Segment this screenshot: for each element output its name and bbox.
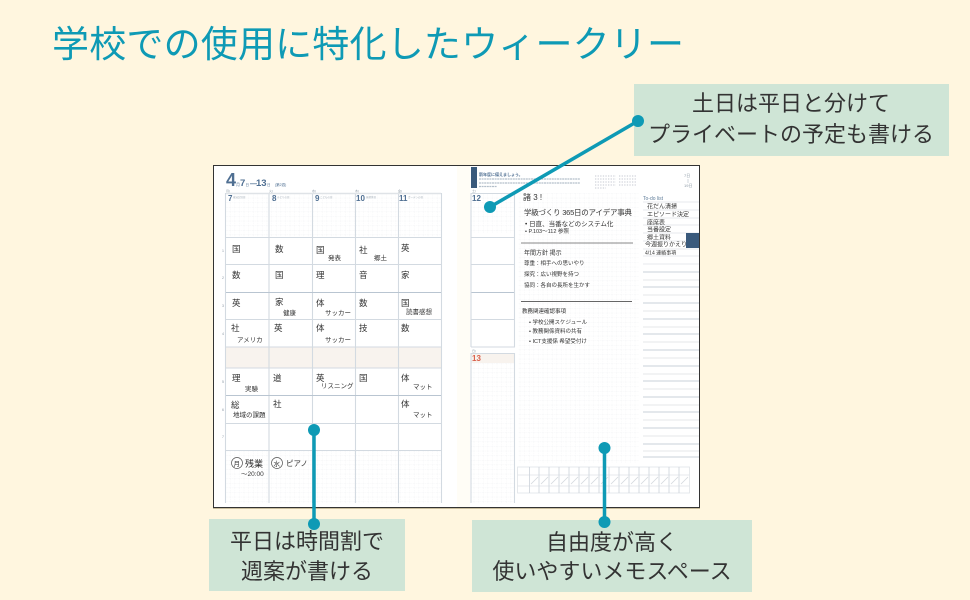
date heading: 日 [246, 183, 249, 187]
weekday header labels: 水( [312, 188, 316, 193]
date numbers: 11 [399, 194, 408, 203]
date sub labels: 振替休日 [366, 195, 377, 199]
after school notes [232, 458, 308, 478]
handwritten timetable entries: 技 [359, 323, 368, 333]
period numbers: 2 [222, 276, 224, 280]
panel: to-do list: 当番設定 [647, 226, 671, 234]
handwritten timetable entries: 道 [273, 373, 282, 383]
arrow: memo callout to memo space [598, 442, 610, 528]
handwritten memo [522, 192, 632, 345]
panel: left page weekly timetable: 実験 [245, 384, 258, 393]
panel: weekend columns [471, 188, 515, 503]
handwritten timetable entries: 理 [232, 373, 241, 383]
panel: to-do list: To-do list [643, 196, 664, 202]
panel: left page weekly timetable: リスニング [321, 381, 354, 390]
period numbers: 5 [222, 380, 224, 384]
handwritten timetable entries: 国 [232, 244, 241, 254]
panel: left page weekly timetable: サッカー [325, 309, 351, 317]
period numbers: 6 [222, 408, 224, 412]
panel: left page weekly timetable: マット [413, 383, 432, 391]
weekday header labels: 金( [398, 188, 402, 193]
weekday header labels: 月( [226, 189, 230, 193]
handwritten timetable entries: 国 [275, 270, 284, 280]
date heading: — [250, 181, 257, 188]
period numbers: 4 [222, 332, 224, 336]
panel: free memo space [518, 192, 639, 463]
after school notes: 残業 [245, 458, 263, 469]
handwritten timetable entries: 体 [316, 323, 325, 333]
date sub labels: ガーデンの日 [408, 195, 424, 199]
handwritten timetable entries: 体 [401, 373, 410, 383]
handwritten timetable entries: 総 [231, 400, 240, 410]
arrow: weekend callout to weekend column [484, 115, 644, 213]
period numbers: 1 [222, 249, 224, 253]
panel: weekend columns: 土( [472, 188, 476, 193]
panel: left page weekly timetable: マット [413, 411, 432, 419]
panel: left page weekly timetable: 健康 [283, 308, 296, 317]
date numbers: 10 [356, 194, 365, 203]
date heading: 日 [267, 183, 270, 187]
panel: weekend columns: 日( [472, 349, 476, 353]
handwritten memo: 尊重：相手への思いやり [524, 259, 585, 267]
weekday header labels: 木( [355, 188, 359, 193]
handwritten timetable entries: 国 [359, 373, 368, 383]
callout: weekend [634, 84, 949, 156]
date sub labels: 憲法記念日 [233, 195, 246, 199]
date numbers [228, 194, 408, 203]
planner spread [213, 166, 700, 508]
panel: right page header: 19日 [684, 183, 692, 188]
handwritten timetable entries: 国 [316, 245, 325, 255]
after school notes: ピアノ [286, 459, 308, 468]
handwritten timetable entries: 家 [275, 297, 284, 307]
weekday header labels [226, 188, 402, 193]
handwritten timetable entries: 国 [401, 298, 410, 308]
handwritten memo: 探究：広い視野を持つ [524, 270, 579, 278]
date numbers: 8 [272, 194, 277, 203]
panel: left page weekly timetable: 郷土 [374, 253, 388, 262]
callout: memo space [472, 520, 752, 592]
handwritten timetable entries: 体 [401, 399, 410, 409]
mini calendars [595, 176, 637, 188]
handwritten timetable entries: 数 [359, 298, 368, 308]
handwritten timetable entries: 社 [273, 399, 282, 409]
panel: attendance table [518, 467, 690, 493]
panel: left page weekly timetable: アメリカ [237, 336, 263, 344]
handwritten timetable entries: 数 [275, 244, 284, 254]
panel: to-do list: 4/14 連絡事項 [645, 250, 676, 256]
handwritten timetable entries: 社 [359, 245, 368, 255]
handwritten memo: • ICT支援係 希望受付け [529, 337, 587, 345]
callout: memo space: 使いやすいメモスペース [492, 559, 732, 584]
date heading: 月 [236, 182, 240, 187]
callout: weekend: 土日は平日と分けて [692, 91, 890, 116]
handwritten timetable entries: 数 [401, 323, 410, 333]
date sub labels [233, 195, 424, 199]
date sub labels: こどもの日 [320, 195, 333, 199]
handwritten timetable entries [231, 243, 410, 410]
panel: to-do list: 郷土資料 [647, 234, 671, 242]
handwritten timetable entries: 数 [232, 270, 241, 280]
handwritten memo: 諸 3 ! [523, 192, 542, 202]
callout: memo space: 自由度が高く [546, 530, 678, 555]
period numbers: 3 [222, 304, 224, 308]
panel: left page weekly timetable: 地域の課題 [233, 410, 266, 419]
date heading [226, 170, 286, 190]
handwritten timetable entries: 英 [232, 298, 241, 308]
panel: left page weekly timetable: 発表 [328, 253, 342, 262]
panel: right page header: 7日 [684, 173, 690, 178]
handwritten memo: 年間方針 掲示 [524, 249, 562, 257]
handwritten timetable entries: 理 [316, 270, 325, 280]
callout: weekday: 平日は時間割で [230, 529, 384, 554]
panel: to-do list: 花だん清掃 [647, 202, 677, 210]
callout: weekend: プライベートの予定も書ける [648, 122, 934, 147]
arrow: weekday callout to timetable [308, 424, 320, 530]
after school notes: 月 [234, 460, 240, 468]
date heading: 7 [240, 178, 245, 189]
handwritten memo: • 日直、当番などのシステム化 [525, 219, 614, 228]
handwritten memo: • 教務関係資料の共有 [529, 327, 582, 335]
date heading: 13 [256, 178, 267, 189]
date heading: 4 [226, 170, 236, 190]
date heading: (第2週) [275, 182, 286, 187]
callout: weekday [209, 519, 405, 591]
handwritten memo: • 学校公開スケジュール [529, 318, 588, 326]
handwritten memo: 学級づくり 365日のアイデア事典 [524, 207, 632, 217]
month tab [686, 233, 699, 248]
period numbers: 7 [222, 435, 224, 439]
date sub labels: みどりの日 [277, 195, 290, 199]
handwritten timetable entries: 英 [401, 243, 410, 253]
panel: to-do list: 座席表 [647, 218, 665, 226]
weekday header labels: 火( [269, 189, 273, 193]
panel: to-do list: エピソード決定 [647, 210, 689, 218]
panel: to-do list: 今週振りかえり [645, 240, 687, 248]
handwritten memo: 協同：各自の長所を生かす [524, 281, 591, 289]
panel: to-do list [643, 196, 699, 457]
period numbers [222, 249, 224, 439]
panel: weekend columns: 13 [472, 354, 481, 363]
panel: left page weekly timetable: サッカー [325, 336, 351, 344]
panel: right page header [471, 167, 692, 188]
panel: weekend columns: 12 [472, 194, 481, 203]
title: 学校での使用に特化したウィークリー [52, 24, 684, 65]
handwritten timetable entries: 英 [316, 373, 325, 383]
handwritten timetable entries: 社 [231, 323, 240, 333]
callout: weekday: 週案が書ける [241, 559, 373, 584]
panel: left page weekly timetable [222, 170, 442, 503]
after school notes: 水 [274, 459, 280, 468]
date numbers: 9 [315, 194, 320, 203]
handwritten timetable entries: 体 [316, 298, 325, 308]
handwritten timetable entries: 音 [359, 270, 368, 280]
handwritten timetable entries: 家 [401, 270, 410, 280]
date numbers: 7 [228, 194, 233, 203]
handwritten memo: • P.103～112 参照 [525, 227, 569, 235]
after school notes: ～20:00 [241, 471, 264, 478]
handwritten timetable entries: 英 [274, 323, 283, 333]
handwritten memo: 教務関連確認事項 [522, 307, 567, 315]
panel: right page header: 新年度に備えましょう。 [479, 171, 523, 177]
panel: left page weekly timetable: 読書感想 [406, 307, 432, 316]
